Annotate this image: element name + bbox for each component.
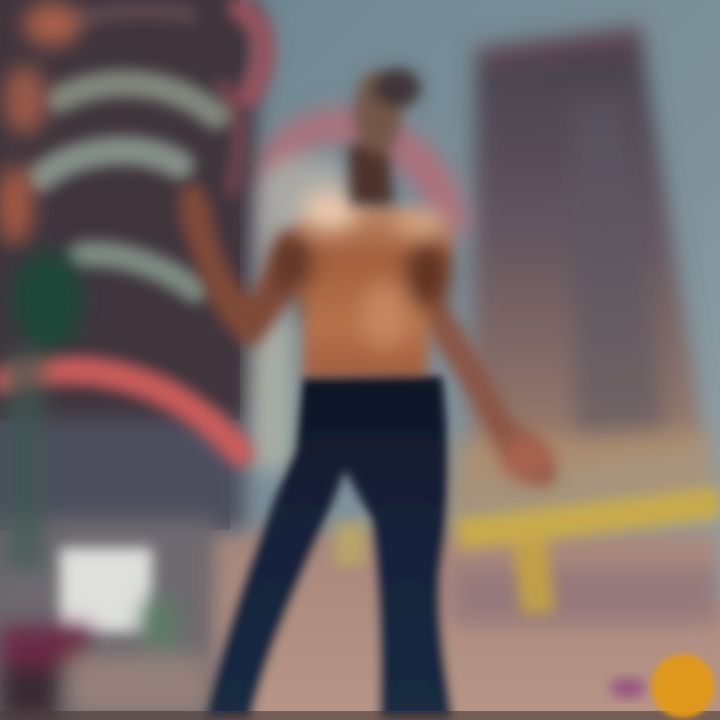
orange lights on tower edge [0,2,80,245]
edge base: lower left [0,530,210,720]
lowered hand [503,434,551,482]
dark ground strip [0,711,720,720]
phone in hand [297,278,333,322]
edge base: left tower lower [0,420,230,530]
lowered arm [412,275,555,484]
ground [200,530,720,720]
man figure [179,68,555,720]
torso [284,205,451,378]
yellow railing [335,487,720,614]
lower left details [0,595,210,720]
right tower [445,26,720,525]
green plant [5,250,84,570]
raised arm [179,183,312,348]
pink arch behind figure [240,108,470,470]
jeans [205,376,452,720]
neck and head [348,68,421,205]
white box [60,548,152,632]
tower stripes [5,8,264,452]
edge base: left tower [0,0,240,420]
edge base: ground [200,600,720,720]
left striped tower [0,0,264,720]
magenta accent near badge [610,678,646,698]
orange coin badge [651,654,715,718]
chest shading [272,190,450,347]
